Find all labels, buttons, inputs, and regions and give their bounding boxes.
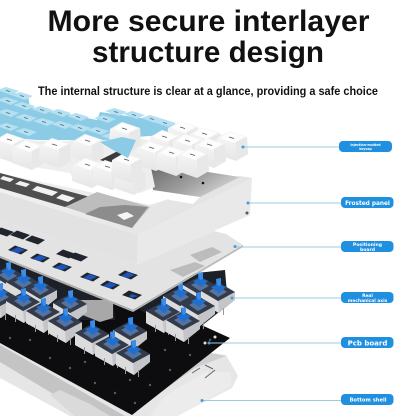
title: structure design bbox=[92, 36, 324, 69]
callout: keycaps: keycap bbox=[359, 147, 373, 151]
right inner wall bbox=[150, 163, 240, 197]
callout: keycaps bbox=[242, 141, 392, 152]
positioning board bbox=[0, 215, 243, 312]
callout: frosted panel bbox=[246, 197, 394, 208]
grey stabilizer well bbox=[65, 192, 150, 228]
subtitle: The internal structure is clear at a glance, providing a safe choice bbox=[38, 86, 378, 98]
title: More secure interlayer bbox=[48, 5, 370, 38]
callout: mechanical axis bbox=[230, 292, 394, 304]
callout: positioning board: Positioning bbox=[353, 242, 382, 248]
callout: pcb board: Pcb board bbox=[348, 340, 387, 348]
switches bbox=[0, 255, 235, 377]
callout: mechanical axis: mechanical axis bbox=[348, 298, 388, 304]
callout: bottom shell bbox=[200, 394, 394, 405]
callout: positioning board bbox=[234, 241, 394, 253]
callout: pcb board bbox=[208, 337, 394, 348]
callout: keycaps: Injection-molded bbox=[350, 143, 381, 147]
keycaps bbox=[0, 87, 248, 195]
dark inner plate bbox=[0, 173, 90, 207]
pcb board bbox=[0, 290, 230, 415]
callout: frosted panel: Frosted panel bbox=[345, 201, 390, 207]
callout: positioning board: board bbox=[360, 247, 375, 253]
bottom shell bbox=[0, 340, 238, 416]
title bbox=[48, 5, 370, 69]
frosted panel frame bbox=[0, 150, 252, 265]
callout: mechanical axis: Real bbox=[362, 293, 373, 299]
callout: bottom shell: Bottom shell bbox=[349, 398, 387, 404]
